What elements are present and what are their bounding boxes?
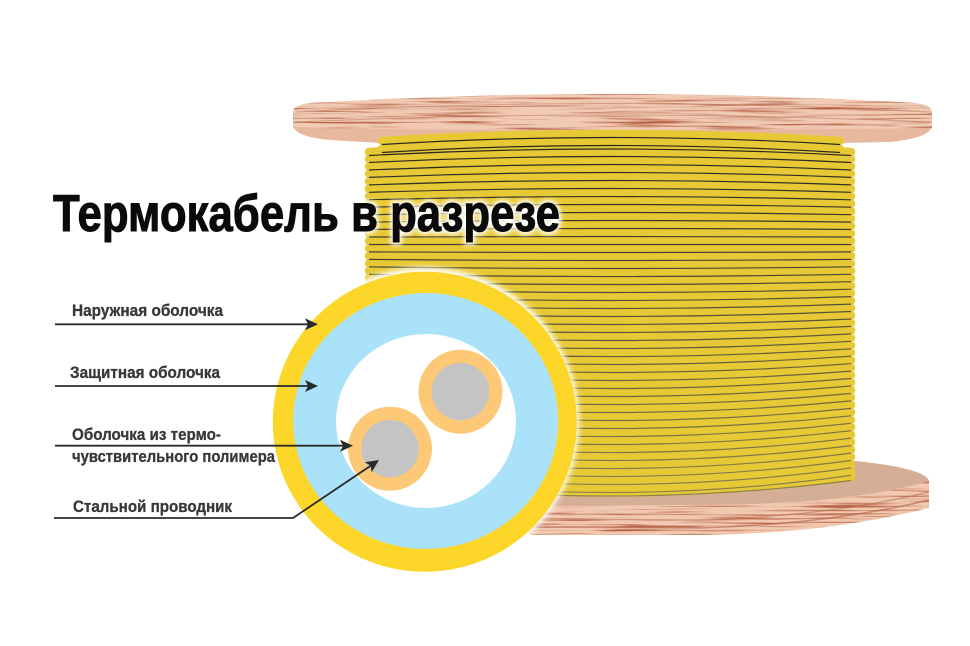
conductor lower <box>348 407 432 491</box>
infographic canvas <box>53 94 932 572</box>
cross-section diagram <box>271 268 579 576</box>
bottom flange <box>528 461 929 535</box>
label: thermosensitive polymer sheath: чувствительного полимера <box>72 448 276 466</box>
inner filler <box>336 334 516 508</box>
cable windings <box>369 134 851 496</box>
outer sheath <box>273 272 577 572</box>
label: thermosensitive polymer sheath <box>55 426 353 466</box>
label: protective sheath: Защитная оболочка <box>70 364 221 382</box>
label: outer sheath <box>55 302 318 330</box>
label: steel conductor: Стальной проводник <box>73 498 233 516</box>
protective sheath <box>293 293 558 549</box>
conductor upper <box>418 350 502 434</box>
top flange <box>293 90 933 143</box>
label: outer sheath: Наружная оболочка <box>72 302 224 320</box>
label: thermosensitive polymer sheath: Оболочка из термо- <box>72 426 221 444</box>
white glow around section <box>271 268 579 576</box>
label: steel conductor <box>54 460 379 518</box>
title: Термокабель в разрезе <box>53 185 560 243</box>
spool illustration <box>293 90 933 538</box>
title: Термокабель в разрезе <box>53 185 560 243</box>
label: protective sheath <box>55 364 318 392</box>
